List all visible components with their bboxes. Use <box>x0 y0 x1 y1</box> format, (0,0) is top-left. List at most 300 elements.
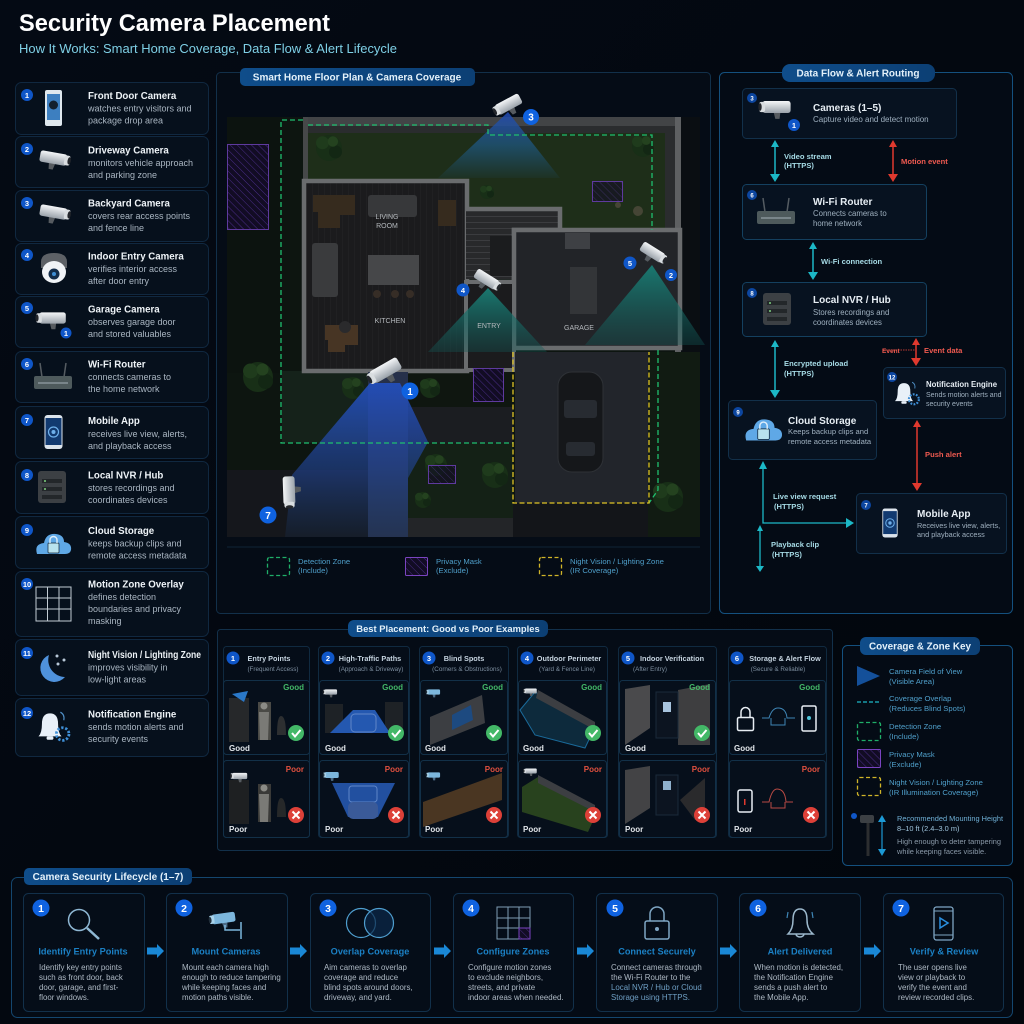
panel: floor plan <box>216 68 710 614</box>
step 6: 6 <box>755 903 761 915</box>
room: stairs <box>466 209 562 282</box>
panel: coverage and zone key <box>842 637 1012 866</box>
step 1: door, garage, and first- <box>39 983 119 992</box>
step 2: Mount each camera high <box>182 963 269 972</box>
card: driveway camera <box>16 136 208 188</box>
good example: high-traffic paths: Good <box>382 683 403 692</box>
camera 3: 3 <box>528 112 534 124</box>
arrow: encrypted upload <box>770 340 848 398</box>
card: cloud storage: keeps backup clips and <box>88 538 182 548</box>
camera 5 <box>624 241 677 281</box>
key: camera field of view <box>857 666 963 686</box>
card: backyard camera: covers rear access points <box>88 211 191 221</box>
arrow: wi-fi connection: Wi-Fi connection <box>821 257 882 266</box>
card: garage camera: 1 <box>64 329 68 338</box>
step 7 <box>884 894 1004 1012</box>
arrow: push alert <box>912 420 962 491</box>
key: privacy mask: Privacy Mask <box>889 750 935 759</box>
good example: high-traffic paths: Good <box>325 744 346 753</box>
mounting height: High enough to deter tampering <box>897 837 1001 846</box>
arrow: motion event: Motion event <box>901 157 948 166</box>
column: outdoor perimeter <box>518 646 608 838</box>
node: cameras <box>742 88 956 138</box>
node: wi-fi router: 6 <box>750 194 754 200</box>
camera 3 <box>491 93 539 125</box>
node: mobile app: Receives live view, alerts, <box>917 521 1000 530</box>
step 6: the Notification Engine <box>754 973 834 982</box>
good example: high-traffic paths <box>320 680 408 754</box>
step 6: Alert Delivered <box>768 946 832 956</box>
poor example: outdoor perimeter: Poor <box>523 825 541 834</box>
step 3: coverage and reduce <box>324 973 399 982</box>
mounting height: 8–10 ft (2.4–3.0 m) <box>897 824 959 833</box>
arrow: motion event <box>888 140 948 182</box>
card: notification engine: 12 <box>23 709 31 718</box>
step 1: 1 <box>38 903 44 915</box>
column: outdoor perimeter: (Yard & Fence Line) <box>539 666 595 673</box>
heading pill: data flow <box>782 64 935 82</box>
room labels: ENTRY <box>477 323 501 330</box>
legend: privacy mask <box>406 557 482 576</box>
good example: storage and alert flow <box>730 680 826 754</box>
node: wi-fi router <box>742 184 926 240</box>
poor example: storage and alert flow: Poor <box>802 765 820 774</box>
step 2: motion paths visible. <box>182 993 254 1002</box>
key: privacy mask: (Exclude) <box>889 760 922 769</box>
key: coverage overlap: Coverage Overlap <box>889 694 951 703</box>
card: motion zone overlay: defines detection <box>88 592 156 602</box>
card: wi-fi router: 6 <box>25 360 29 369</box>
key: detection zone: Detection Zone <box>889 722 941 731</box>
card: night vision / lighting zone <box>16 640 208 696</box>
room labels: GARAGE <box>564 325 594 332</box>
heading pill: lifecycle: Camera Security Lifecycle (1–7) <box>33 872 183 883</box>
coverage cone: camera 4 <box>428 288 547 352</box>
card: backyard camera: and fence line <box>88 223 144 233</box>
heading pill: data flow: Data Flow & Alert Routing <box>797 68 919 80</box>
step 4 <box>454 894 574 1012</box>
step 1: Identify key entry points <box>39 963 122 972</box>
camera 4 <box>456 268 503 297</box>
heading pill: coverage key <box>860 637 980 655</box>
heading pill: best placement: Best Placement: Good vs Poor Examples <box>356 623 540 634</box>
key: night vision zone: Night Vision / Lighting Zone <box>889 778 983 787</box>
arrow: event data: Event <box>882 348 901 355</box>
panel: component list <box>16 82 208 756</box>
arrow: push alert: Push alert <box>925 450 962 459</box>
poor example: indoor verification <box>620 760 716 838</box>
node: cloud storage: Cloud Storage <box>788 416 857 427</box>
good example: indoor verification: Good <box>689 683 710 692</box>
node: mobile app: Mobile App <box>917 509 971 520</box>
mounting height: while keeping faces visible. <box>896 847 986 856</box>
arrow: live view request: Live view request <box>773 492 837 501</box>
room labels: KITCHEN <box>375 318 405 325</box>
step 2: Mount Cameras <box>192 946 260 956</box>
step 3 <box>310 894 430 1012</box>
arrow: playback clip: (HTTPS) <box>772 550 802 559</box>
node: wi-fi router: home network <box>813 219 862 228</box>
good example: storage and alert flow: Good <box>734 744 755 753</box>
node: cloud storage: remote access metadata <box>788 437 872 446</box>
step 1: such as front door, back <box>39 973 123 982</box>
column: blind spots: (Corners & Obstructions) <box>432 666 502 673</box>
column: entry points <box>224 646 310 838</box>
legend: detection zone: (Include) <box>298 566 328 575</box>
room labels: LIVING <box>376 214 398 221</box>
key: coverage overlap <box>857 694 966 713</box>
card: front door camera <box>16 82 208 134</box>
node: notification engine: security events <box>926 401 973 408</box>
heading pill: floor plan <box>240 68 475 86</box>
good example: entry points: Good <box>229 744 250 753</box>
card: indoor entry camera: Indoor Entry Camera <box>88 252 184 262</box>
heading pill: best placement <box>348 620 548 637</box>
room labels: ROOM <box>376 223 398 230</box>
step 1 <box>24 894 144 1012</box>
room: garage <box>514 230 680 348</box>
privacy masks <box>228 144 622 484</box>
node: cloud storage: 9 <box>736 410 740 416</box>
step 2: while keeping faces and <box>181 983 266 992</box>
node: cameras: 3 <box>750 96 754 102</box>
card: indoor entry camera: 4 <box>25 251 30 260</box>
column: storage and alert flow: Storage & Alert Flow <box>749 654 821 663</box>
legend: privacy mask: (Exclude) <box>436 566 469 575</box>
poor example: high-traffic paths <box>320 760 408 838</box>
step 5: 5 <box>612 903 618 915</box>
step 7: Verify & Review <box>910 946 979 956</box>
step 5: Storage using HTTPS. <box>611 993 690 1002</box>
column: indoor verification: Indoor Verification <box>640 654 704 663</box>
title: Security Camera Placement <box>19 10 330 37</box>
good example: outdoor perimeter: Good <box>523 744 544 753</box>
legend: privacy mask: Privacy Mask <box>436 557 482 566</box>
card: wi-fi router: connects cameras to <box>88 372 171 382</box>
legend: detection zone <box>268 557 350 576</box>
card: indoor entry camera: after door entry <box>88 276 150 286</box>
card: front door camera: watches entry visitors and <box>87 104 192 114</box>
card: driveway camera: 2 <box>25 145 29 154</box>
card: backyard camera: Backyard Camera <box>88 198 170 210</box>
good example: outdoor perimeter: Good <box>581 683 602 692</box>
column: high-traffic paths: 2 <box>326 654 330 663</box>
camera 7 <box>260 476 302 524</box>
key: detection zone: (Include) <box>889 732 919 741</box>
panel: data flow <box>720 64 1012 614</box>
card: mobile app <box>16 406 208 458</box>
card: cloud storage: remote access metadata <box>88 550 187 560</box>
arrow 5 to 6 <box>720 944 737 958</box>
fence <box>303 117 681 352</box>
step 2: 2 <box>181 903 187 915</box>
heading pill: lifecycle <box>24 868 192 885</box>
card: local nvr / hub <box>16 462 208 514</box>
poor example: outdoor perimeter: Poor <box>584 765 602 774</box>
good example: entry points: Good <box>283 683 304 692</box>
step 4: Configure motion zones <box>468 963 551 972</box>
card: backyard camera <box>16 190 208 242</box>
card: indoor entry camera <box>16 244 208 294</box>
card: driveway camera: monitors vehicle approach <box>88 158 193 168</box>
poor example: indoor verification: Poor <box>625 825 643 834</box>
legend: night vision <box>540 557 664 576</box>
node: cameras: Capture video and detect motion <box>813 115 929 124</box>
card: local nvr / hub: 8 <box>25 471 29 480</box>
camera 5: 5 <box>628 259 632 268</box>
subtitle: How It Works: Smart Home Coverage, Data Flow & Alert Lifecycle <box>19 41 397 56</box>
camera 4: 4 <box>461 286 466 295</box>
step 7: The user opens live <box>898 963 967 972</box>
poor example: outdoor perimeter <box>518 760 606 838</box>
panel: best placement <box>218 620 832 850</box>
mounting height <box>851 813 1003 856</box>
good example: indoor verification <box>620 680 716 754</box>
step 4: 4 <box>468 903 474 915</box>
arrow: event data <box>882 338 963 366</box>
column: indoor verification: (After Entry) <box>633 666 667 673</box>
card: mobile app: 7 <box>25 416 29 425</box>
node: notification engine <box>884 368 1006 418</box>
card: notification engine: Notification Engine <box>88 710 177 720</box>
key: night vision zone <box>858 778 983 797</box>
card: local nvr / hub: coordinates devices <box>88 495 168 505</box>
poor example: blind spots: Poor <box>485 765 503 774</box>
key: detection zone <box>858 722 941 741</box>
card: mobile app: receives live view, alerts, <box>88 429 187 439</box>
node: mobile app <box>856 494 1006 554</box>
card: driveway camera: Driveway Camera <box>88 146 169 156</box>
column: high-traffic paths: High-Traffic Paths <box>339 654 401 663</box>
column: entry points: 1 <box>231 654 235 663</box>
room labels <box>375 214 594 332</box>
card: motion zone overlay <box>16 572 208 636</box>
column: indoor verification <box>618 646 716 838</box>
good example: blind spots <box>420 680 508 754</box>
card: garage camera <box>16 296 208 348</box>
arrow: live view request <box>759 461 854 528</box>
poor example: indoor verification: Poor <box>692 765 710 774</box>
arrow: playback clip: Playback clip <box>771 540 819 549</box>
node: mobile app: 7 <box>864 504 868 510</box>
step 3: Aim cameras to overlap <box>324 963 407 972</box>
column: outdoor perimeter: Outdoor Perimeter <box>537 654 601 663</box>
arrow: encrypted upload: Encrypted upload <box>784 359 848 368</box>
step 6: sends a push alert to <box>754 983 828 992</box>
poor example: blind spots: Poor <box>425 825 443 834</box>
camera 1: 1 <box>407 387 413 398</box>
step 4: indoor areas when needed. <box>468 993 564 1002</box>
room: living and kitchen <box>304 181 467 371</box>
key: coverage overlap: (Reduces Blind Spots) <box>889 704 966 713</box>
node: mobile app: and playback access <box>917 530 985 539</box>
room: entry <box>466 282 514 370</box>
step 2 <box>166 894 288 1012</box>
node: local nvr / hub: 8 <box>750 292 754 298</box>
step 5 <box>596 894 718 1012</box>
card: garage camera: observes garage door <box>88 317 176 327</box>
column: blind spots <box>420 646 508 838</box>
column: high-traffic paths <box>318 646 410 838</box>
heading pill: floor plan: Smart Home Floor Plan & Camera Coverage <box>253 72 462 84</box>
card: garage camera: and stored valuables <box>88 329 172 339</box>
poor example: entry points: Poor <box>229 825 247 834</box>
column: blind spots: Blind Spots <box>444 654 484 663</box>
step 3: Overlap Coverage <box>331 946 409 956</box>
card: motion zone overlay: boundaries and privacy <box>88 604 182 614</box>
poor example: blind spots <box>420 760 508 838</box>
legend: night vision: Night Vision / Lighting Zone <box>570 557 664 566</box>
poor example: storage and alert flow: Poor <box>734 825 752 834</box>
step 7: 7 <box>898 903 904 915</box>
card: mobile app: and playback access <box>88 441 172 451</box>
step 4: Configure Zones <box>476 946 550 956</box>
card: garage camera: 5 <box>25 304 29 313</box>
card: front door camera: Front Door Camera <box>88 91 177 102</box>
poor example: entry points: Poor <box>286 765 304 774</box>
arrow 4 to 5 <box>577 944 594 958</box>
step 5: the Wi-Fi Router to the <box>611 973 691 982</box>
node: cloud storage: Keeps backup clips and <box>788 427 868 436</box>
step 7: review recorded clips. <box>898 993 974 1002</box>
node: local nvr / hub <box>742 282 926 336</box>
step 6: the Mobile App. <box>754 993 808 1002</box>
poor example: high-traffic paths: Poor <box>385 765 403 774</box>
card: notification engine: sends motion alerts and <box>88 722 184 732</box>
step 5: Connect Securely <box>618 946 697 956</box>
column: high-traffic paths: (Approach & Driveway) <box>339 666 403 673</box>
coverage cone: camera 5 <box>585 265 705 345</box>
card: motion zone overlay: Motion Zone Overlay <box>88 580 184 590</box>
node: notification engine: Sends motion alerts and <box>926 392 1002 399</box>
walkway <box>368 372 408 537</box>
step 3: blind spots around doors, <box>324 983 413 992</box>
car <box>558 372 603 472</box>
node: notification engine: Notification Engine <box>926 380 998 389</box>
arrow 2 to 3 <box>290 944 307 958</box>
card: night vision / lighting zone: low-light areas <box>88 674 147 684</box>
arrow 6 to 7 <box>864 944 881 958</box>
card: wi-fi router: the home network <box>88 384 160 394</box>
column: outdoor perimeter: 4 <box>525 654 530 663</box>
step 7: view or playback to <box>898 973 966 982</box>
good example: blind spots: Good <box>482 683 503 692</box>
node: cameras: 1 <box>792 121 796 130</box>
camera 1 <box>365 357 418 400</box>
poor example: high-traffic paths: Poor <box>325 825 343 834</box>
card: notification engine <box>16 698 208 756</box>
node: notification engine: 12 <box>889 376 896 382</box>
card: wi-fi router <box>16 352 208 402</box>
column: entry points: (Frequent Access) <box>247 666 299 673</box>
card: garage camera: Garage Camera <box>88 304 160 316</box>
column: blind spots: 3 <box>427 654 431 663</box>
good example: entry points <box>224 680 310 754</box>
node: local nvr / hub: Stores recordings and <box>813 308 889 317</box>
night vision zone <box>513 352 649 503</box>
step 6 <box>740 894 860 1012</box>
step 1: floor windows. <box>39 993 89 1002</box>
node: local nvr / hub: coordinates devices <box>813 318 882 327</box>
card: front door camera: package drop area <box>88 116 163 126</box>
mounting height: Recommended Mounting Height <box>897 814 1003 823</box>
card: wi-fi router: Wi-Fi Router <box>88 360 146 370</box>
good example: outdoor perimeter <box>518 680 606 754</box>
arrow: video stream: Video stream <box>784 152 832 161</box>
card: backyard camera: 3 <box>25 199 29 208</box>
card: cloud storage: 9 <box>25 526 29 535</box>
floor plan map <box>227 93 705 537</box>
camera 5: 2 <box>669 271 673 280</box>
step 3: 3 <box>325 903 331 915</box>
coverage cone: camera 3 <box>438 112 560 178</box>
good example: indoor verification: Good <box>625 744 646 753</box>
coverage cone: camera 1 <box>285 383 428 537</box>
legend: night vision: (IR Coverage) <box>570 566 619 575</box>
card: cloud storage: Cloud Storage <box>88 526 155 537</box>
step 3: driveway, and yard. <box>324 993 392 1002</box>
detection zone <box>281 120 658 503</box>
camera 7: 7 <box>265 511 271 522</box>
arrow: wi-fi connection <box>808 242 882 280</box>
legend: detection zone: Detection Zone <box>298 557 350 566</box>
node: cloud storage <box>728 400 876 460</box>
arrow: encrypted upload: (HTTPS) <box>784 369 814 378</box>
key: camera field of view: Camera Field of View <box>889 667 963 676</box>
card: mobile app: Mobile App <box>88 416 140 427</box>
step 7: verify the event and <box>898 983 967 992</box>
good example: storage and alert flow: Good <box>799 683 820 692</box>
card: motion zone overlay: 10 <box>23 580 31 589</box>
card: driveway camera: and parking zone <box>88 170 157 180</box>
step 5: Connect cameras through <box>611 963 702 972</box>
card: night vision / lighting zone: 11 <box>23 649 31 658</box>
node: wi-fi router: Wi-Fi Router <box>813 197 872 208</box>
card: motion zone overlay: masking <box>88 616 122 626</box>
step 5: Local NVR / Hub or Cloud <box>611 983 702 992</box>
key: camera field of view: (Visible Area) <box>889 677 935 686</box>
panel: lifecycle <box>12 868 1012 1018</box>
arrow 3 to 4 <box>434 944 451 958</box>
poor example: entry points <box>224 760 310 838</box>
arrow: event data: Event data <box>924 346 963 355</box>
step 1: Identify Entry Points <box>38 946 128 956</box>
poor example: storage and alert flow <box>730 760 826 838</box>
good example: blind spots: Good <box>425 744 446 753</box>
step 2: enough to reduce tampering <box>182 973 281 982</box>
key: privacy mask <box>858 750 935 769</box>
column: indoor verification: 5 <box>626 654 630 663</box>
node: local nvr / hub: Local NVR / Hub <box>813 295 891 306</box>
arrow: video stream: (HTTPS) <box>784 161 814 170</box>
card: night vision / lighting zone: Night Vision / Lighting Zone <box>88 650 202 661</box>
heading pill: coverage key: Coverage & Zone Key <box>869 642 972 652</box>
node: wi-fi router: Connects cameras to <box>813 209 887 218</box>
step 6: When motion is detected, <box>754 963 843 972</box>
key: night vision zone: (IR Illumination Coverage) <box>889 788 979 797</box>
arrow: live view request: (HTTPS) <box>774 502 804 511</box>
column: storage and alert flow <box>728 646 826 838</box>
arrow: video stream <box>770 140 832 182</box>
step 4: to exclude neighbors, <box>468 973 543 982</box>
driveway <box>515 352 648 503</box>
card: front door camera: 1 <box>25 91 29 100</box>
card: indoor entry camera: verifies interior access <box>88 264 178 274</box>
card: local nvr / hub: Local NVR / Hub <box>88 470 163 482</box>
node: cameras: Cameras (1–5) <box>813 103 881 114</box>
arrow: playback clip <box>756 525 819 572</box>
column: storage and alert flow: (Secure & Reliable) <box>751 666 805 673</box>
